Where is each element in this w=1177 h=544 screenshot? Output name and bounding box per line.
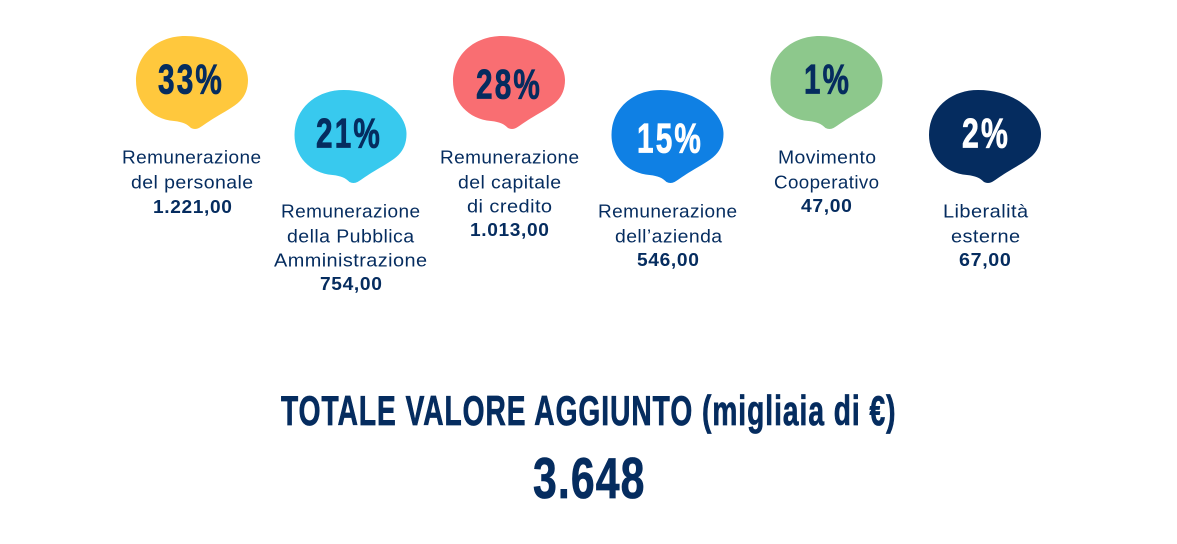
value: 47,00	[801, 196, 852, 216]
percentage 1%: 1%	[804, 56, 851, 102]
label: dell’azienda	[615, 226, 723, 246]
percentage 21%: 21%	[316, 110, 382, 156]
icon: cyan speech bubble	[294, 90, 406, 183]
value: 1.221,00	[153, 197, 232, 217]
label: Cooperativo	[774, 172, 880, 192]
icon: green speech bubble	[770, 36, 882, 129]
label: Remunerazione	[122, 146, 262, 168]
label: Remunerazione	[598, 200, 738, 222]
icon: red speech bubble	[453, 36, 565, 129]
panel: remunerazione della pubblica amministrazione	[274, 90, 428, 294]
label: Movimento	[778, 146, 876, 168]
label: esterne	[951, 226, 1020, 246]
icon: navy speech bubble	[929, 90, 1041, 183]
panel: remunerazione del personale	[122, 36, 262, 217]
label: del personale	[131, 172, 254, 192]
percentage 33%: 33%	[158, 56, 224, 102]
label: della Pubblica	[287, 226, 415, 246]
value: 754,00	[320, 274, 382, 294]
percentage 2%: 2%	[962, 110, 1010, 156]
heading: totale valore aggiunto: TOTALE VALORE AGGIUNTO (migliaia di €)	[281, 387, 896, 434]
label: Remunerazione	[440, 146, 580, 168]
value: 67,00	[959, 250, 1012, 270]
label: Amministrazione	[274, 250, 428, 270]
label: di credito	[467, 196, 552, 216]
icon: blue speech bubble	[612, 90, 724, 183]
panel: liberalità esterne	[929, 90, 1041, 270]
panel: remunerazione dell'azienda	[598, 90, 738, 270]
value: 546,00	[637, 250, 700, 270]
icon: yellow speech bubble	[136, 36, 248, 129]
percentage 28%: 28%	[476, 60, 542, 108]
total value: 3.648	[533, 447, 646, 511]
value: 1.013,00	[470, 220, 550, 240]
percentage 15%: 15%	[637, 114, 703, 162]
panel: movimento cooperativo	[770, 36, 882, 216]
label: Remunerazione	[281, 200, 420, 222]
panel: remunerazione del capitale di credito	[440, 36, 580, 240]
label: del capitale	[458, 172, 562, 192]
label: Liberalità	[943, 200, 1029, 222]
